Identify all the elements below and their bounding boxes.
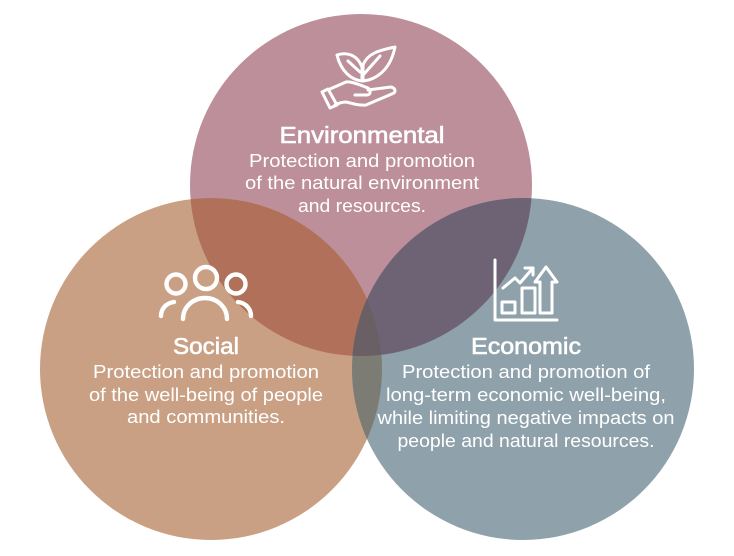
text block: environmental description: Protection and promotion <box>249 150 475 171</box>
text block: social description: and communities. <box>127 406 285 427</box>
icon: bar chart with rising arrows <box>495 260 557 320</box>
icon: group of people <box>161 267 251 319</box>
overlap: environmental and social <box>190 198 367 356</box>
text block: environmental description <box>245 150 479 216</box>
panel: economic circle <box>352 198 694 540</box>
text block: social description: Protection and promotion <box>93 361 319 382</box>
heading: Economic: Economic <box>471 333 581 359</box>
text block: economic description: people and natural resources. <box>398 430 654 451</box>
icon: hand holding plant <box>322 47 395 108</box>
text block: social description: of the well-being of people <box>89 384 323 405</box>
panel: environmental circle <box>190 14 532 356</box>
text block: environmental description: and resources. <box>298 195 426 216</box>
text block: economic description: long-term economic well-being, <box>386 384 666 405</box>
text block: social description <box>89 361 323 427</box>
panel: social circle <box>40 198 382 540</box>
text block: economic description: while limiting negative impacts on <box>376 407 674 428</box>
text block: economic description: Protection and promotion of <box>402 361 651 382</box>
heading: Social: Social <box>173 333 239 359</box>
heading: Environmental: Environmental <box>280 122 444 148</box>
text block: economic description <box>376 361 674 451</box>
overlap: all three circles <box>352 299 382 356</box>
overlap: social and economic <box>352 355 382 439</box>
overlap: environmental and economic <box>352 198 532 355</box>
text block: environmental description: of the natural environment <box>245 172 479 193</box>
